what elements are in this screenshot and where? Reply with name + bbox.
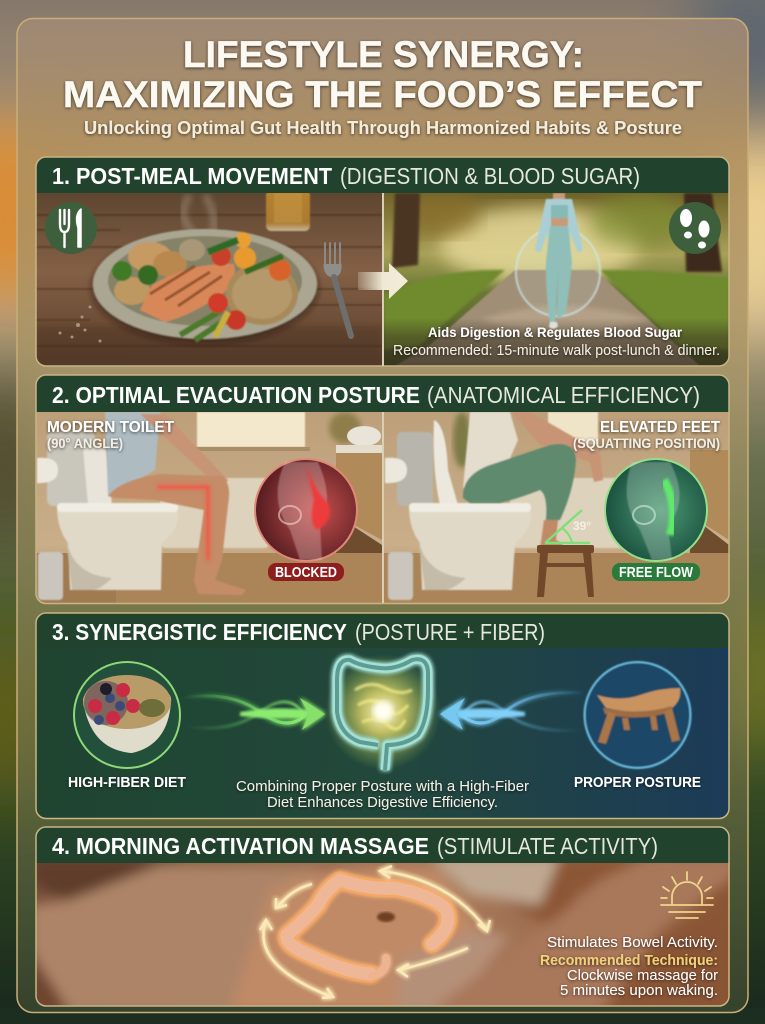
plate of food <box>91 229 319 344</box>
label: modern toilet: MODERN TOILET <box>47 419 175 436</box>
panel 1 right image: walk in the park <box>384 193 729 366</box>
panel 1 caption <box>393 324 720 359</box>
title block <box>63 34 702 138</box>
high-fiber bowl icon <box>74 662 180 768</box>
red anatomy circle <box>255 459 357 561</box>
panel 3 caption: Diet Enhances Digestive Efficiency. <box>267 795 498 811</box>
panel 2 header: (ANATOMICAL EFFICIENCY) <box>427 382 700 408</box>
panel 3 header <box>36 613 729 648</box>
panel 4: morning massage <box>30 827 735 1012</box>
label: elevated feet: ELEVATED FEET <box>600 419 721 436</box>
angle marker 39 degrees <box>545 510 591 543</box>
walking woman with halo <box>516 193 600 329</box>
title line 1: LIFESTYLE SYNERGY: <box>183 34 584 75</box>
panel 1 header: 1. POST-MEAL MOVEMENT <box>52 163 332 189</box>
glowing colon outline <box>287 880 448 976</box>
glowing colon <box>325 654 441 770</box>
label: elevated feet: (SQUATTING POSITION) <box>573 436 720 451</box>
icon: fork and knife <box>45 202 97 254</box>
wooden stool icon <box>584 662 690 768</box>
panel 4 image: abdomen <box>30 857 735 1012</box>
angle marker 39 degrees: 39° <box>573 519 591 533</box>
subtitle: Unlocking Optimal Gut Health Through Harmonized Habits & Posture <box>84 117 682 138</box>
footstool <box>537 545 594 597</box>
glass of beer <box>266 190 310 231</box>
toilet <box>37 432 178 600</box>
panel 1: post-meal movement <box>36 157 729 366</box>
panel 3 header: (POSTURE + FIBER) <box>355 619 545 645</box>
fork <box>324 243 351 336</box>
panel 2: evacuation posture <box>36 375 729 604</box>
panel 2 header: 2. OPTIMAL EVACUATION POSTURE <box>52 382 420 408</box>
panel 2 left image: modern toilet <box>36 412 382 603</box>
panel 4 header <box>36 827 729 863</box>
panel 4 caption: Stimulates Bowel Activity. <box>547 935 718 951</box>
label: modern toilet: (90° ANGLE) <box>47 436 123 451</box>
green anatomy circle <box>605 459 707 561</box>
panel 1 caption: Aids Digestion & Regulates Blood Sugar <box>428 324 683 340</box>
panel 4 caption: Recommended Technique: <box>540 953 718 969</box>
panel 4 caption: Clockwise massage for <box>567 968 718 984</box>
free flow badge: FREE FLOW <box>619 565 693 581</box>
panel 1 header <box>36 157 729 193</box>
panel 3 header: 3. SYNERGISTIC EFFICIENCY <box>52 619 347 645</box>
icon: sunrise <box>661 872 713 918</box>
label: modern toilet <box>47 419 175 451</box>
blocked badge: BLOCKED <box>275 565 337 581</box>
label: elevated feet <box>573 419 721 451</box>
title line 2: MAXIMIZING THE FOOD’S EFFECT <box>63 74 702 115</box>
toilet with raised lid <box>385 420 531 600</box>
steam <box>180 193 218 230</box>
seated woman <box>105 412 246 595</box>
label: proper posture: PROPER POSTURE <box>574 775 701 791</box>
massage direction arrows <box>260 866 490 998</box>
panel 3: synergistic efficiency <box>36 613 729 818</box>
green flow arrow <box>182 696 325 730</box>
panel 3 caption <box>236 779 529 811</box>
panel 3 caption: Combining Proper Posture with a High-Fiber <box>236 779 529 795</box>
panel 2 right image: elevated feet <box>384 412 729 603</box>
panel 4 caption <box>540 935 718 999</box>
panel 1 left image: meal on wooden table <box>36 190 382 366</box>
seated woman with feet on stool <box>463 412 603 549</box>
spilled seeds <box>58 306 102 342</box>
panel 4 header: (STIMULATE ACTIVITY) <box>437 833 658 859</box>
panel 1 caption: Recommended: 15-minute walk post-lunch & dinner. <box>393 343 720 359</box>
panel 2 header <box>36 375 729 412</box>
blue flow arrow <box>440 693 585 731</box>
panel 4 header: 4. MORNING ACTIVATION MASSAGE <box>52 833 429 859</box>
panel 4 caption: 5 minutes upon waking. <box>560 983 718 999</box>
arrow between meal and walk <box>358 263 408 299</box>
icon: footprints <box>669 202 721 254</box>
label: high-fiber diet: HIGH-FIBER DIET <box>68 775 186 791</box>
panel 1 header: (DIGESTION & BLOOD SUGAR) <box>340 163 640 189</box>
